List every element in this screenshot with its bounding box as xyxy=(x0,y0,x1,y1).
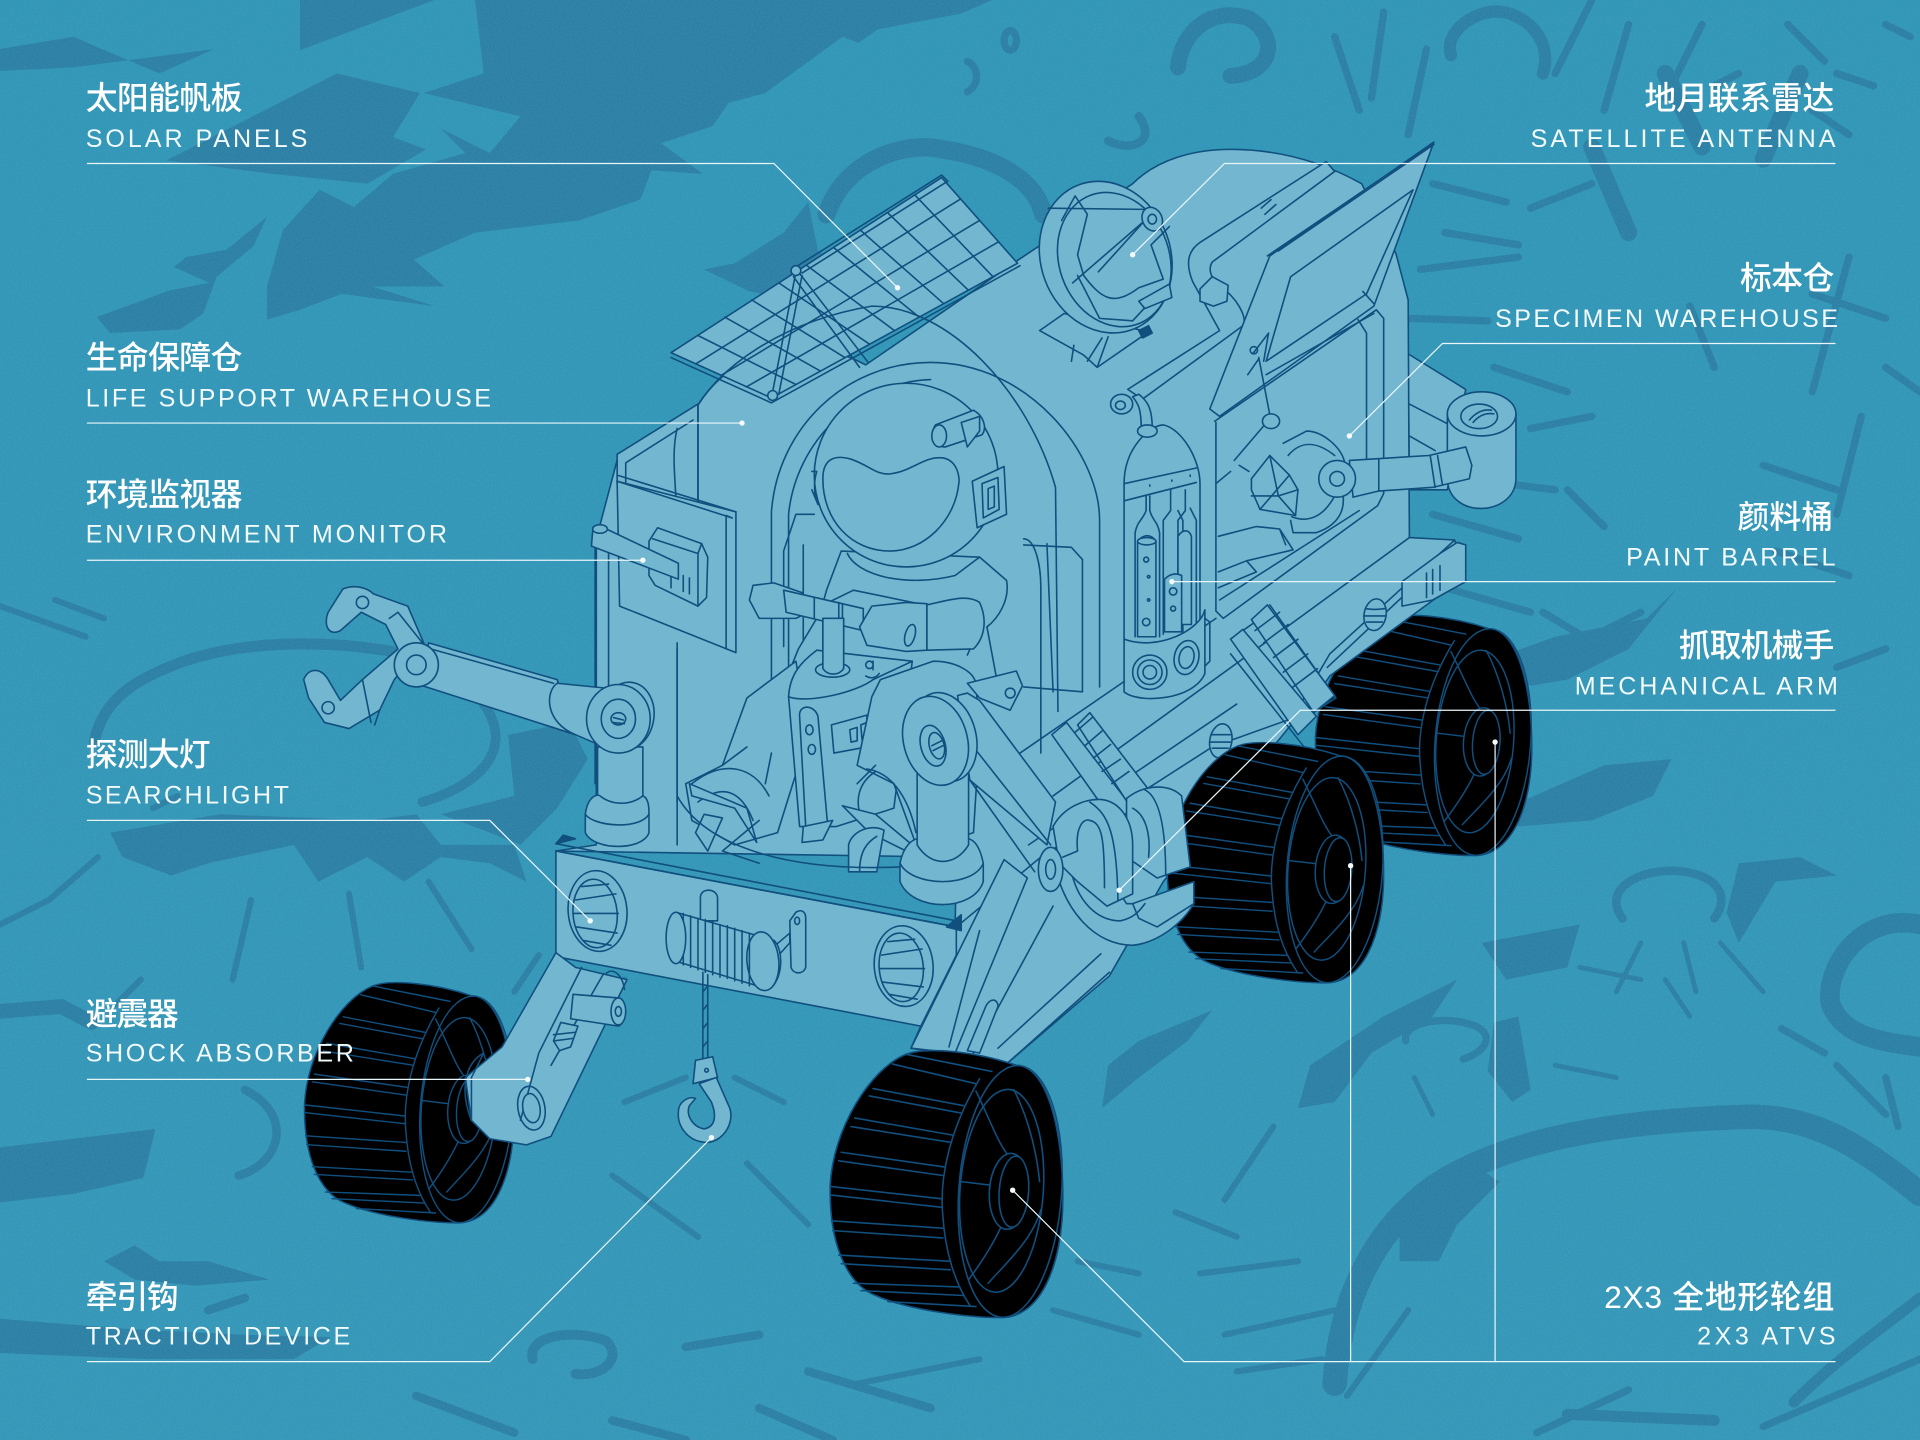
label: mechanical arm: MECHANICAL ARM xyxy=(1575,672,1838,700)
middle wheel xyxy=(1167,743,1391,986)
outer cockpit arch xyxy=(771,362,1100,790)
label: satellite antenna: SATELLITE ANTENNA xyxy=(1531,125,1836,153)
pillar link xyxy=(893,685,1056,872)
label: shock absorber: 避震器 xyxy=(86,996,179,1032)
label: shock absorber: SHOCK ABSORBER xyxy=(86,1040,354,1068)
label: life support warehouse: 生命保障仓 xyxy=(86,340,243,376)
radiators xyxy=(1052,605,1336,823)
label: specimen warehouse: 标本仓 xyxy=(1740,260,1834,296)
mechanical joint assembly xyxy=(1038,787,1194,945)
base box xyxy=(556,835,961,1026)
astronaut: torso and arms xyxy=(784,551,1007,735)
label: environment monitor xyxy=(86,477,646,563)
paint barrel xyxy=(1124,394,1210,699)
label: searchlight xyxy=(86,736,593,924)
front right wheel xyxy=(830,1051,1070,1321)
label: environment monitor: ENVIRONMENT MONITOR xyxy=(86,520,447,548)
label: searchlight: 探测大灯 xyxy=(86,736,211,772)
label: shock absorber xyxy=(86,996,530,1082)
shoulder column and base xyxy=(585,747,649,846)
label: environment monitor: 环境监视器 xyxy=(86,477,243,513)
specimen warehouse window xyxy=(1215,310,1472,618)
mechanical claw arm xyxy=(304,587,659,755)
cockpit floor arc xyxy=(677,649,900,868)
right pillar and ring xyxy=(900,771,983,905)
left wheel xyxy=(304,983,521,1226)
label: mechanical arm: 抓取机械手 xyxy=(1679,627,1834,663)
door hatch xyxy=(1210,142,1434,429)
winch drum and cable xyxy=(666,890,806,1063)
label: solar panels xyxy=(86,80,900,290)
label: satellite antenna xyxy=(1130,80,1836,257)
rover body shell xyxy=(556,149,1463,931)
astronaut: hands and steering bar xyxy=(749,583,984,667)
searchlight right xyxy=(871,923,936,1009)
label: paint barrel xyxy=(1169,499,1836,584)
label: paint barrel: 颜料桶 xyxy=(1738,499,1833,535)
label: life support warehouse: LIFE SUPPORT WAREHOUSE xyxy=(86,385,491,413)
antenna dish xyxy=(1018,162,1193,367)
traction hook xyxy=(678,1057,731,1142)
searchlight left xyxy=(565,868,630,954)
label: traction device: 牵引钩 xyxy=(86,1279,179,1315)
astronaut: helmet xyxy=(812,383,1007,567)
control pedestal xyxy=(789,618,912,842)
label: traction device: TRACTION DEVICE xyxy=(86,1322,350,1350)
label: 2x3 atvs: 2X3 全地形轮组 xyxy=(1604,1279,1834,1315)
label: solar panels: SOLAR PANELS xyxy=(86,125,307,153)
label: specimen warehouse: SPECIMEN WAREHOUSE xyxy=(1495,305,1838,333)
label: solar panels: 太阳能帆板 xyxy=(86,80,242,116)
pipe xyxy=(1111,162,1335,414)
label: searchlight: SEARCHLIGHT xyxy=(86,781,289,809)
rover illustration xyxy=(304,142,1539,1321)
environment monitor xyxy=(591,475,736,653)
solar panels xyxy=(671,175,1058,711)
label: paint barrel: PAINT BARREL xyxy=(1626,544,1836,572)
monitor fin and mount xyxy=(595,404,698,845)
label: life support warehouse xyxy=(86,340,745,426)
front-right strut xyxy=(911,860,1109,1063)
seat xyxy=(784,514,1082,753)
label: 2x3 atvs xyxy=(1010,739,1836,1362)
chassis rail and understructure xyxy=(911,538,1466,1063)
astronaut: right leg xyxy=(842,661,1022,872)
label: traction device xyxy=(86,1135,714,1362)
label: specimen warehouse xyxy=(1347,260,1838,439)
rear wheel xyxy=(1315,615,1539,859)
front-left suspension strut xyxy=(465,953,627,1145)
cylinder behind the body xyxy=(1408,354,1516,508)
label: satellite antenna: 地月联系雷达 xyxy=(1644,80,1834,116)
label: 2x3 atvs: 2X3 ATVS xyxy=(1697,1322,1836,1350)
label: mechanical arm xyxy=(1116,627,1838,893)
astronaut: left leg and boot xyxy=(686,661,808,851)
